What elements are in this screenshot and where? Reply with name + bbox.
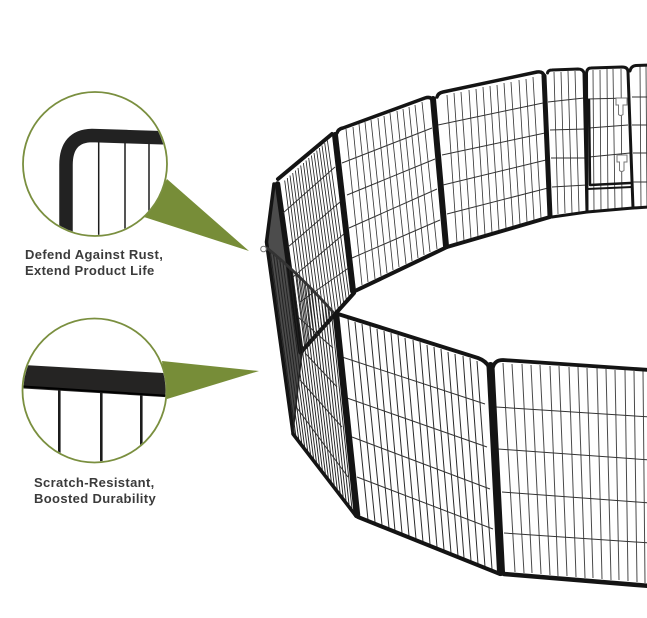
zoom circle: straight rail bbox=[15, 318, 172, 465]
caption: rust bbox=[25, 247, 163, 278]
caption: rust: Extend Product Life bbox=[25, 263, 155, 278]
icon: upper latch bbox=[616, 98, 627, 116]
panel: front centre bbox=[336, 314, 500, 574]
panel: front folded left bbox=[261, 246, 356, 516]
zoom circle: rounded corner bbox=[23, 92, 170, 240]
icon: lower latch bbox=[617, 155, 627, 172]
panel: narrow panel beside door bbox=[548, 69, 587, 217]
fence bbox=[261, 65, 647, 586]
door frame bbox=[589, 100, 630, 185]
panel: door panel bbox=[586, 67, 633, 212]
caption: rust: Defend Against Rust, bbox=[25, 247, 163, 262]
panel: back left bbox=[278, 134, 354, 351]
panel: front right bbox=[490, 360, 647, 586]
arrow: pointer to fence corner bbox=[144, 179, 249, 251]
caption: scratch bbox=[34, 475, 156, 506]
panel: back centre bbox=[437, 72, 550, 247]
arrow: pointer to fence rail bbox=[162, 361, 259, 399]
panel: back centre left bbox=[335, 97, 447, 291]
caption: scratch: Scratch-Resistant, bbox=[34, 475, 155, 490]
caption: scratch: Boosted Durability bbox=[34, 491, 156, 506]
panel: far right top bbox=[630, 65, 647, 208]
icon: ring clip bbox=[261, 246, 266, 252]
callout: rail detail bbox=[15, 318, 259, 465]
callout: corner detail bbox=[23, 92, 249, 251]
panel: far left dark folded panel bbox=[266, 184, 302, 433]
